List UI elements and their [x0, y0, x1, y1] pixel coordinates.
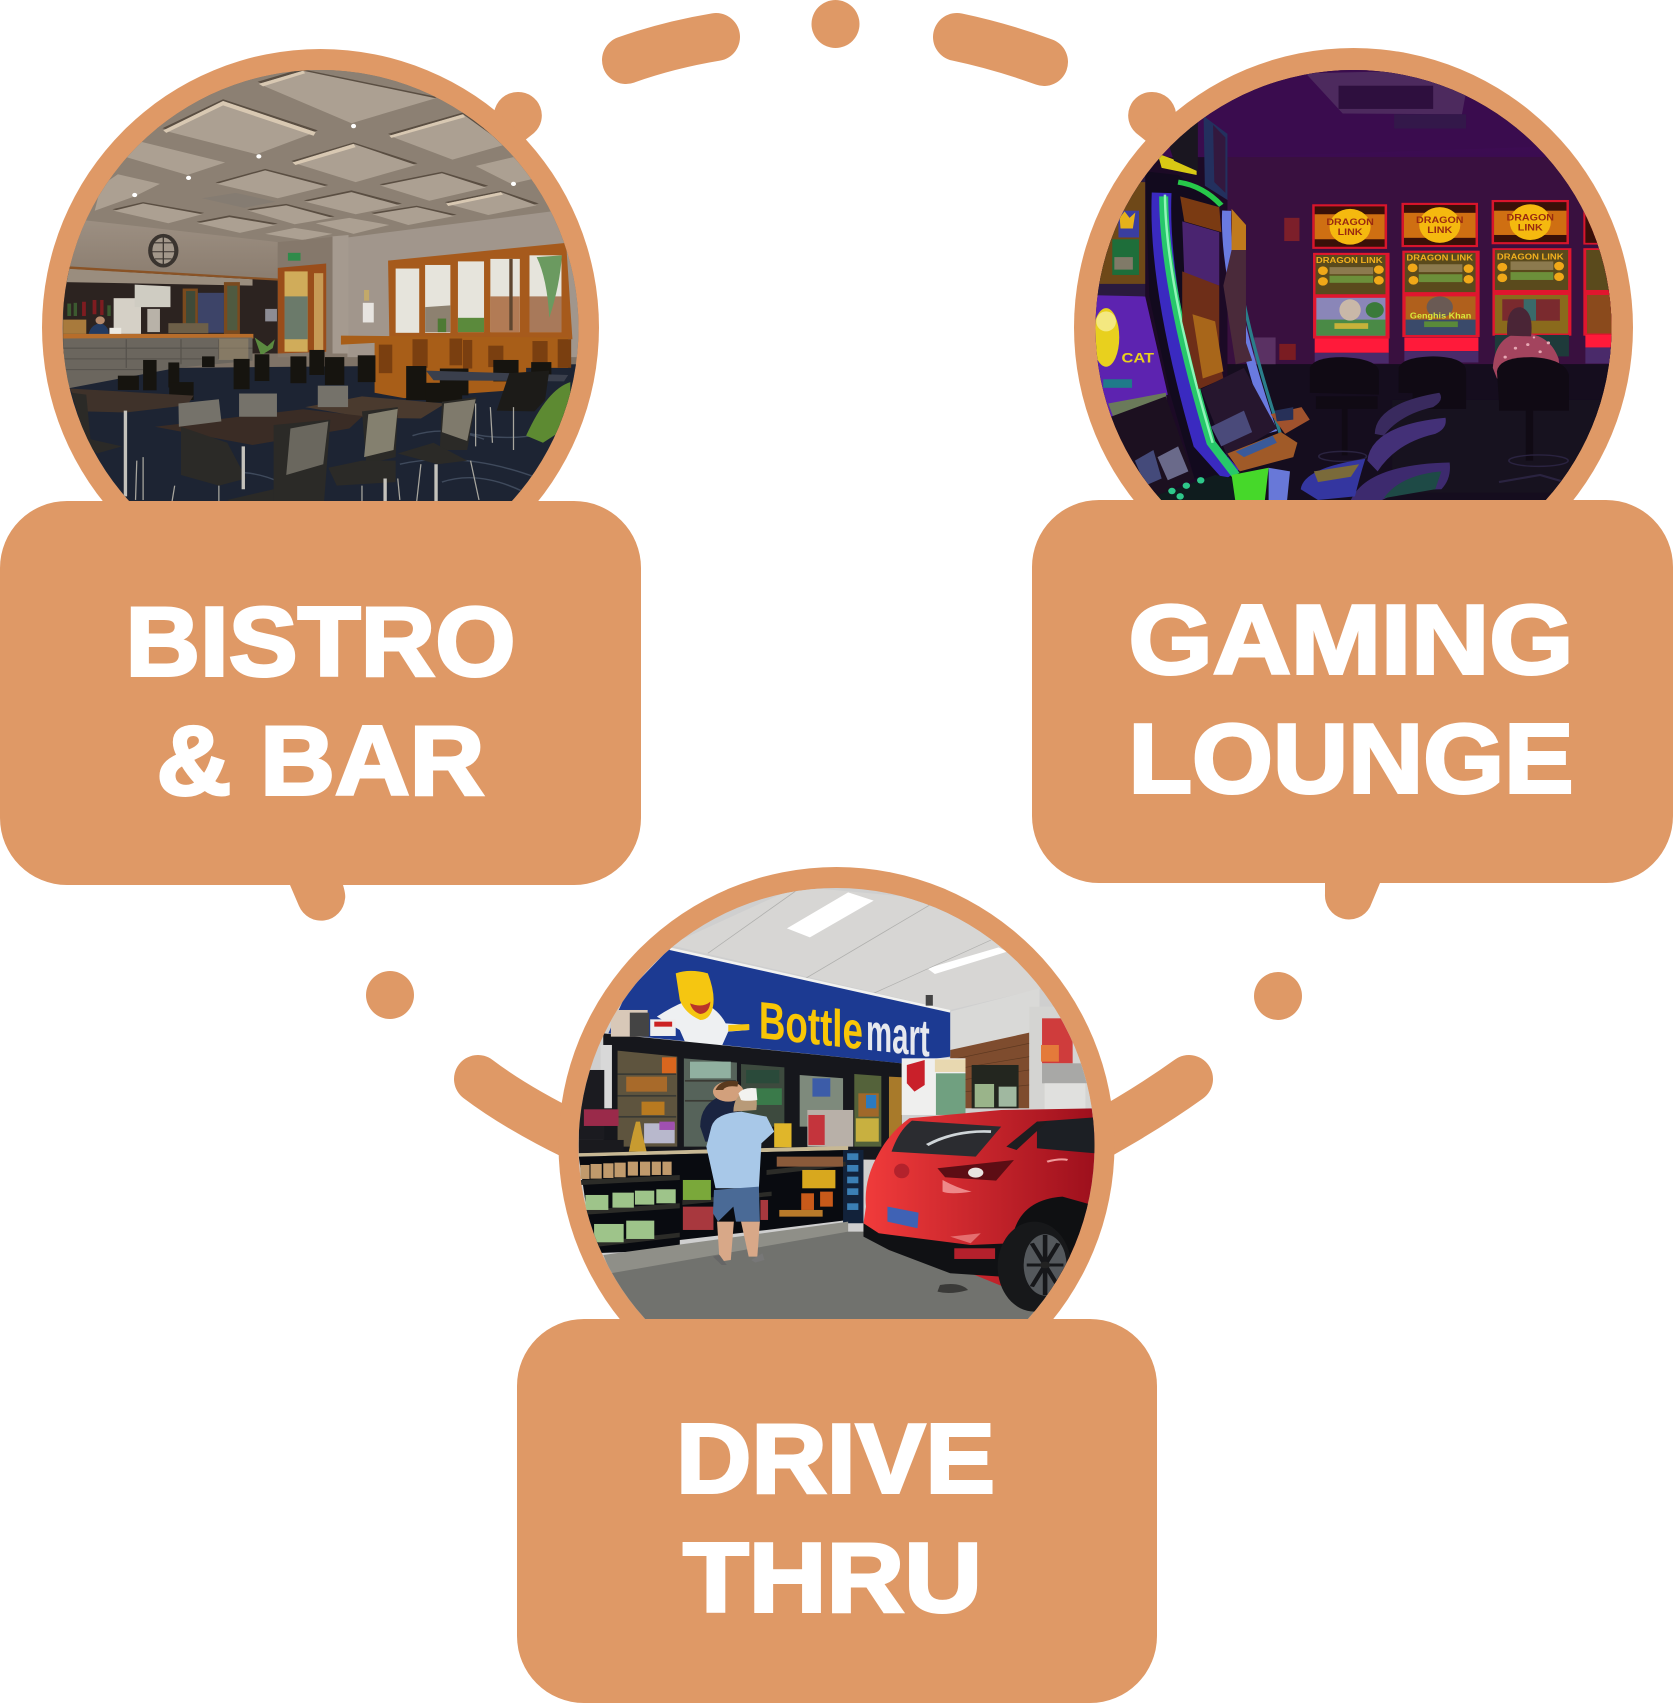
- left side machines: CAT: [1121, 350, 1155, 366]
- store sign: Bottle: [759, 991, 863, 1061]
- lower connector decoration: [366, 971, 1302, 1135]
- heading: GAMING: GAMING: [1128, 584, 1574, 694]
- photo: gaming machines: [1096, 70, 1612, 500]
- heading: LOUNGE: LOUNGE: [1128, 704, 1574, 814]
- left side machines: [1096, 117, 1310, 500]
- seated patron: [1493, 307, 1561, 379]
- panel: gaming lounge: [1032, 48, 1673, 919]
- heading: DRIVE: DRIVE: [676, 1404, 995, 1514]
- label box: gaming lounge: [1032, 500, 1673, 919]
- store sign: mart: [866, 1003, 930, 1069]
- machine bank: DRAGON: [1507, 213, 1554, 223]
- photo ring: [558, 867, 1114, 1423]
- speech box: [1032, 500, 1673, 919]
- icon: connector dot: [1128, 92, 1176, 141]
- label box: drive thru: [517, 1319, 1157, 1703]
- fridges: [603, 1033, 902, 1160]
- machine bank: DRAGON: [1416, 216, 1463, 226]
- heading: THRU: THRU: [683, 1522, 982, 1632]
- machine bank: [1312, 200, 1612, 364]
- machine bank: LINK: [1427, 226, 1453, 236]
- machine bank: LINK: [1338, 228, 1363, 238]
- heading: BISTRO: BISTRO: [126, 586, 516, 696]
- machine bank: Genghis Khan: [1410, 311, 1471, 320]
- speech box: [517, 1319, 1157, 1703]
- machine bank: DRAGON LINK: [1406, 253, 1474, 263]
- staff member and customer: [700, 1081, 792, 1265]
- panel: drive thru: [517, 867, 1157, 1703]
- photo ring: [1074, 48, 1633, 607]
- panel: bistro and bar: [0, 49, 660, 921]
- heading: & BAR: & BAR: [156, 706, 484, 816]
- machine bank: LINK: [1518, 223, 1544, 233]
- counter and shelves: [579, 1146, 863, 1273]
- icon: connector dot: [494, 92, 542, 141]
- photo: bottle shop drive thru: [578, 888, 1094, 1319]
- machine bank: DRAGON LINK: [1497, 252, 1564, 261]
- top arc decoration: [626, 0, 1044, 62]
- machine bank: DRAGON LINK: [1316, 255, 1383, 265]
- photo: bistro dining room: [62, 70, 578, 501]
- store sign: [608, 947, 950, 1069]
- machine bank: DRAGON: [1326, 218, 1374, 228]
- red car: [863, 1108, 1098, 1312]
- photo ring: [42, 49, 599, 606]
- label box: bistro and bar: [0, 501, 641, 921]
- speech box: [0, 501, 641, 921]
- stools: [1301, 393, 1450, 507]
